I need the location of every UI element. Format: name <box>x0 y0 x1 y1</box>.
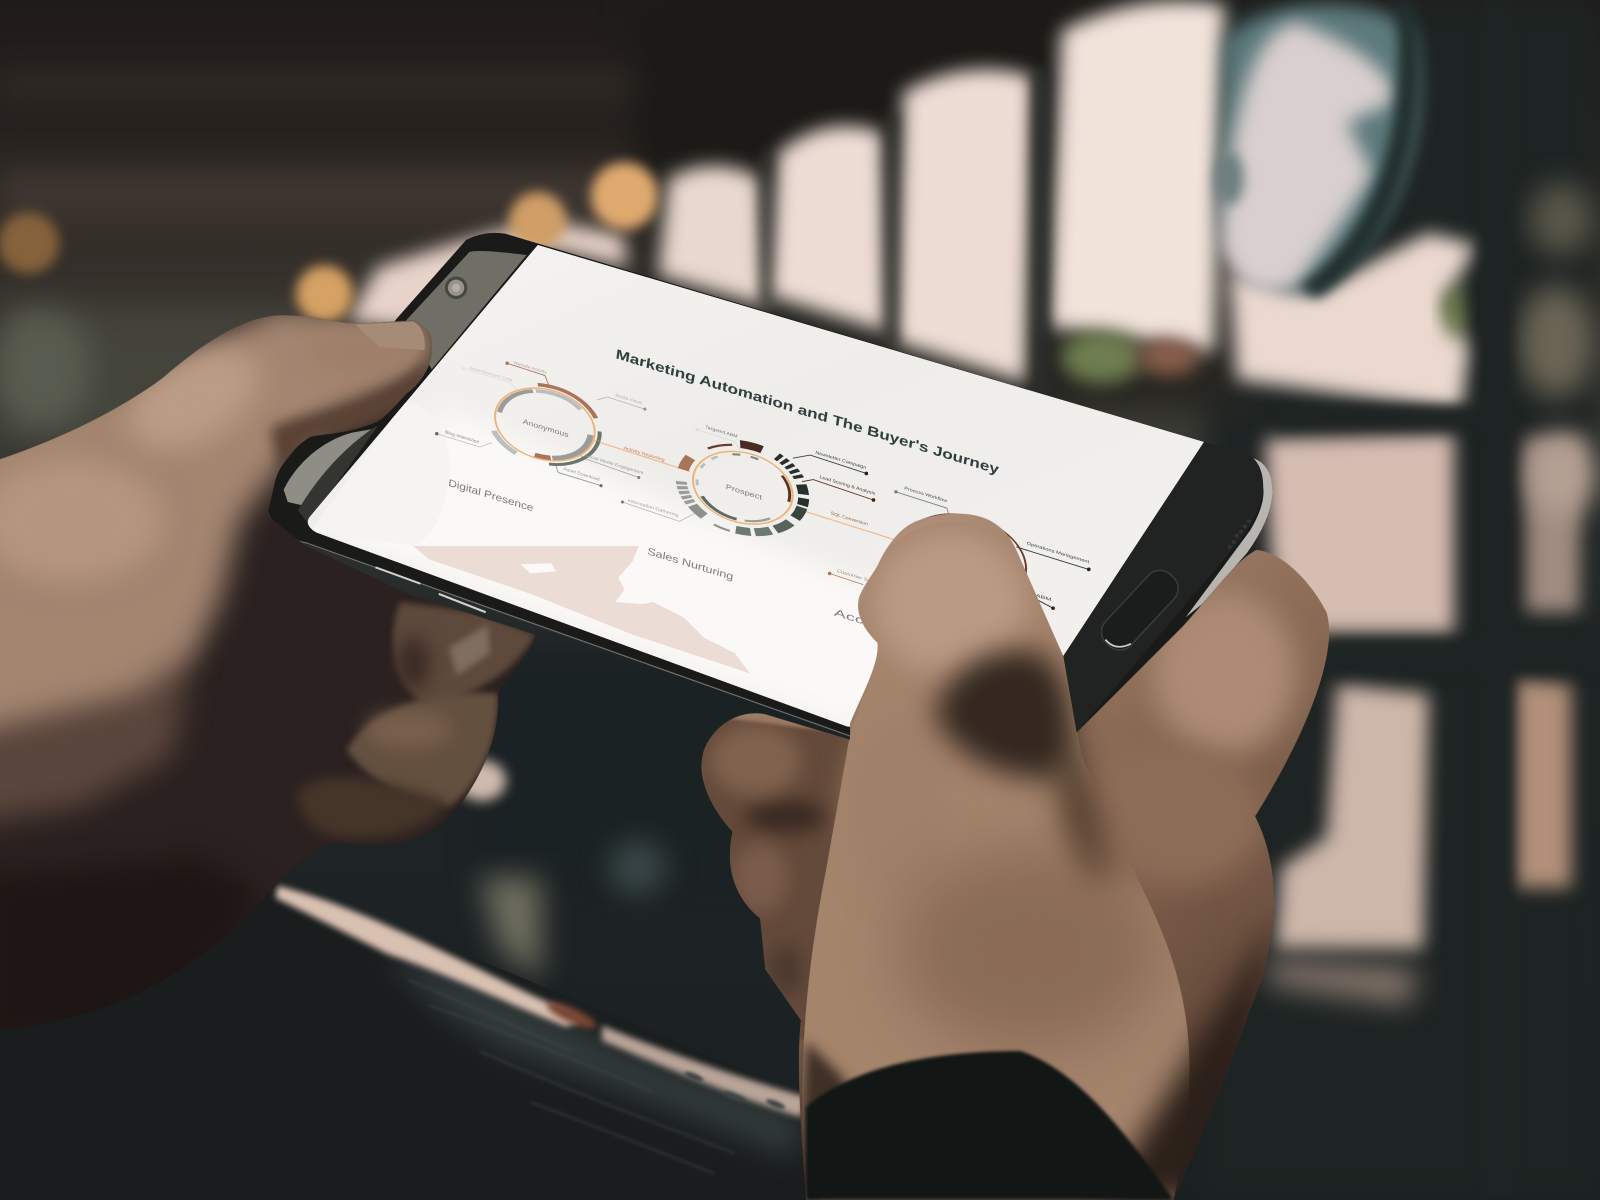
callout labels: Targeted ABM <box>705 424 738 440</box>
pink artefact patch <box>413 546 750 673</box>
hand shadow <box>934 651 1073 778</box>
phone screen <box>308 245 1204 755</box>
right bezel <box>1063 442 1264 733</box>
lighter lower screen wash <box>320 423 878 727</box>
lit back of hand <box>0 306 439 735</box>
ring and stage labels: Accounts <box>833 607 909 640</box>
mid shade band <box>0 633 194 827</box>
ring and stage labels: Prospect <box>725 482 764 502</box>
callout labels: Media Views <box>615 393 643 406</box>
callout labels: Advertisement Click <box>469 365 514 384</box>
connector lines <box>437 363 1089 608</box>
ring and stage labels: Anonymous <box>522 417 570 439</box>
window panes <box>658 1 1582 949</box>
dark sleeve cuff <box>806 1051 1173 1200</box>
wooden rail foreground <box>0 883 816 1200</box>
callout labels: Activity Reporting <box>623 445 665 463</box>
icon: thumb nail <box>355 321 425 350</box>
right hand <box>694 500 1347 1200</box>
top bezel glass <box>406 251 527 369</box>
icon: front camera <box>445 277 467 299</box>
callout labels: Accounts ABM <box>1005 584 1052 603</box>
light blob on screen <box>312 403 406 532</box>
callout labels: SQL Conversion <box>830 511 869 527</box>
callout labels: Social Media Engagement <box>584 453 645 476</box>
ring and stage labels <box>448 417 909 640</box>
callout labels <box>445 360 1090 603</box>
left hand <box>0 306 551 1041</box>
ring: Anonymous <box>480 372 610 477</box>
side buttons <box>376 567 486 612</box>
ring: Prospect <box>666 425 819 550</box>
callout labels: Operations Management <box>1026 541 1090 565</box>
callout labels: Website Activity <box>513 360 548 376</box>
ring and stage labels: Digital Presence <box>448 478 534 514</box>
callout labels: Newsletter Campaign <box>815 450 867 471</box>
callout labels: Information Gathering <box>627 498 679 519</box>
icon: metal phone edge <box>1186 458 1272 617</box>
callout labels: Process Workflow <box>904 486 948 504</box>
bokeh lights <box>0 162 658 329</box>
lower left fingers <box>393 602 536 702</box>
callout labels: Blog Interaction <box>445 430 480 445</box>
index finger and back of hand <box>802 522 1190 1200</box>
lower fingers <box>694 714 857 1041</box>
dark lower background under phone <box>480 663 806 878</box>
lower bezel glass reflection <box>284 429 376 507</box>
icon: finger nail below phone <box>449 624 490 676</box>
callout labels: Customer Success <box>836 568 887 589</box>
infographic title: Marketing Automation and The Buyer's Journey <box>615 347 1001 478</box>
window frame bars <box>761 0 1600 1200</box>
phone body <box>267 233 1272 745</box>
callout labels: Asset Download <box>563 466 600 483</box>
ring: Accounts (mostly hidden by finger) <box>891 500 1037 619</box>
icon: home button <box>1095 564 1184 656</box>
phone side edge highlight <box>273 526 852 737</box>
foliage and bokeh, right side <box>1061 183 1596 515</box>
callout labels: Lead Scoring & Analysis <box>819 474 876 497</box>
connector dots <box>435 362 1091 610</box>
leaf silhouette in round window <box>1215 0 1419 298</box>
ring and stage labels: Sales Nurturing <box>647 546 734 583</box>
